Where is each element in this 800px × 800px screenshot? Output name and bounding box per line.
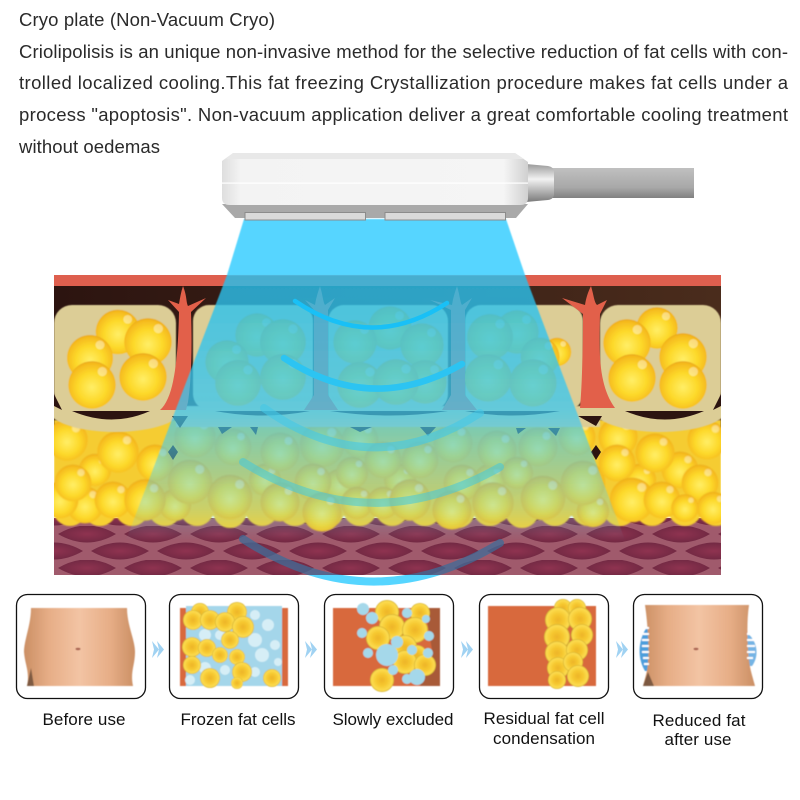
card — [324, 594, 454, 698]
step 3: slowly excluded — [324, 594, 454, 729]
wave 5 in muscle — [243, 539, 500, 582]
arrow 2 — [305, 641, 317, 658]
body top highlight — [226, 153, 524, 159]
wave 1 — [295, 301, 447, 328]
label line 2: after use — [664, 730, 732, 749]
card — [170, 594, 298, 698]
device body — [222, 153, 528, 205]
arrow 4 — [616, 641, 628, 658]
cryo applicator — [222, 153, 694, 220]
metal connector — [526, 164, 554, 202]
wave 4 — [243, 462, 500, 503]
card — [634, 594, 762, 698]
excluded cells image — [333, 600, 440, 692]
cooling plate left — [245, 212, 366, 220]
blood vessels — [160, 286, 615, 410]
dermis background — [54, 286, 721, 431]
epidermis band — [54, 275, 721, 286]
wave 5 below skin — [308, 575, 440, 586]
fat lobule 2 — [193, 305, 313, 410]
step 4: residual fat cell condensation — [480, 594, 608, 748]
step 1: before use — [16, 594, 146, 729]
frozen cells image — [180, 602, 288, 689]
label: Before use — [42, 710, 126, 729]
skin cross-section illustration — [42, 275, 733, 575]
body seam — [222, 182, 528, 184]
belly before — [24, 608, 135, 686]
step 5: reduced fat after use — [634, 594, 762, 749]
fat lobule 1 — [54, 305, 176, 410]
cable — [552, 168, 694, 198]
process steps — [16, 594, 762, 749]
wave 3 — [264, 408, 480, 447]
belly after with blue glow — [640, 605, 757, 686]
label: Residual fat cell — [484, 709, 604, 728]
beam through skin — [126, 275, 625, 540]
card — [16, 594, 146, 698]
muscle layer — [54, 518, 721, 575]
cooling plate right — [385, 212, 506, 220]
connective tissue band — [54, 397, 721, 433]
text line 2: trolled localized cooling.This fat freezing Crystallization procedure makes fat cells under a — [19, 72, 789, 93]
label: Frozen fat cells — [180, 710, 296, 729]
fat lobule 5 — [600, 305, 721, 410]
chamfered underside — [222, 204, 528, 218]
cooling waves — [243, 301, 500, 582]
text line 4: without oedemas — [18, 136, 160, 157]
label: Reduced fat — [652, 711, 746, 730]
text line 1: Criolipolisis is an unique non-invasive method for the selective reduction of fat cells with con- — [19, 41, 788, 62]
heading: cryo plate: Cryo plate (Non-Vacuum Cryo) — [19, 9, 275, 30]
subcutaneous fat layer — [42, 416, 733, 532]
arrow 1 — [152, 641, 164, 658]
step 2: frozen fat cells — [170, 594, 298, 729]
residual cells image — [488, 599, 596, 689]
fat lobule 4 — [464, 305, 583, 410]
fat lobule 3 — [328, 305, 448, 410]
dark gaps between lobules and fat — [54, 394, 721, 460]
card — [480, 594, 608, 698]
intro text — [18, 9, 789, 157]
wave 2 — [284, 358, 462, 389]
label line 2: condensation — [493, 729, 595, 748]
text line 3: process "apoptosis". Non-vacuum application deliver a great comfortable cooling treatment — [19, 104, 788, 125]
arrow 3 — [461, 641, 473, 658]
label: Slowly excluded — [332, 710, 454, 729]
cooling beam — [126, 219, 625, 540]
beam above skin — [227, 219, 525, 275]
